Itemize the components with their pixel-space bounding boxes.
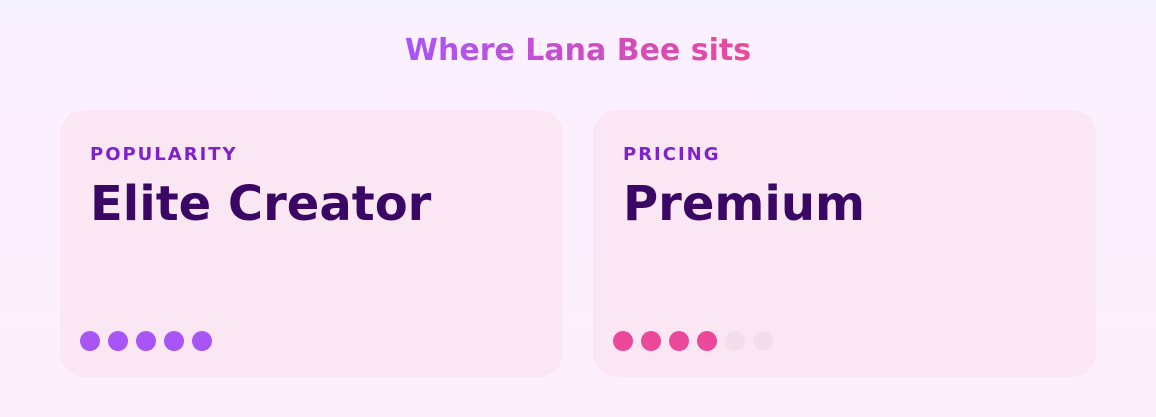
- panel: pricing: [593, 110, 1096, 377]
- label: pricing: PRICING: [623, 144, 720, 165]
- panel: popularity: [60, 110, 563, 377]
- rating dots: pricing 4 of 6: [613, 331, 773, 351]
- rating dots: popularity 5 of 5: [80, 331, 212, 351]
- value: premium: Premium: [623, 176, 865, 232]
- title: Where Lana Bee sits: [405, 33, 751, 68]
- label: popularity: POPULARITY: [90, 144, 238, 165]
- value: elite creator: Elite Creator: [90, 176, 431, 232]
